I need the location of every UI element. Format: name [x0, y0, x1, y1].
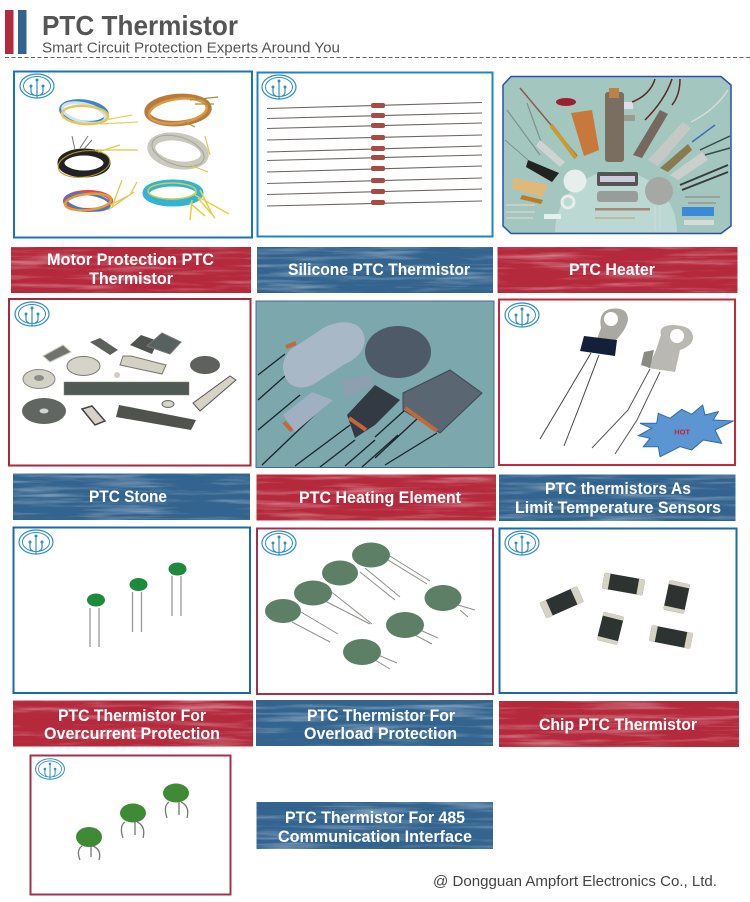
green thermistor 1 — [87, 594, 105, 647]
banner: Overcurrent Protection: Overcurrent Protection — [44, 725, 220, 743]
silver sensor with lug — [592, 325, 693, 454]
banner: Overcurrent Protection: PTC Thermistor For — [58, 707, 207, 725]
green thermistor 3 — [168, 562, 186, 616]
panel: 485 interface thermistors — [30, 756, 230, 894]
banner: PTC thermistors As Limit Temperature Sensors: PTC thermistors As — [545, 480, 691, 498]
coil: grey — [148, 129, 210, 173]
ceramic shapes — [22, 333, 236, 430]
banner: Silicone PTC Thermistor — [257, 247, 493, 293]
panel: overload protection thermistors — [257, 528, 493, 694]
panel: PTC heater photo — [503, 76, 731, 234]
resistor bodies — [371, 103, 385, 205]
banner: Motor Protection PTC Thermistor: Thermistor — [89, 270, 174, 288]
banner: PTC Heating Element — [256, 474, 496, 520]
green thermistor 2 — [130, 578, 148, 632]
subtitle: Smart Circuit Protection Experts Around You — [42, 40, 340, 56]
banner: Overload Protection: PTC Thermistor For — [307, 707, 456, 725]
banner: PTC Stone: PTC Stone — [89, 488, 167, 506]
disc thermistors — [292, 553, 475, 669]
coil: black — [56, 136, 138, 180]
banner: PTC thermistors As Limit Temperature Sensors: Limit Temperature Sensors — [515, 499, 721, 517]
icon: logo — [505, 303, 539, 327]
axial leads — [267, 102, 482, 206]
panel: chip PTC thermistors — [500, 528, 736, 693]
heater tube parts — [505, 79, 730, 218]
icon: logo — [505, 531, 539, 555]
banner: Overload Protection: Overload Protection — [304, 725, 457, 743]
banner: Chip PTC Thermistor — [499, 701, 739, 747]
dark sensor with lug — [540, 308, 628, 446]
callout: HOT starburst: HOT — [674, 430, 691, 436]
banner: Chip PTC Thermistor: Chip PTC Thermistor — [539, 716, 698, 734]
coil: brown — [146, 94, 218, 127]
banner: PTC Heating Element: PTC Heating Element — [299, 489, 461, 507]
banner: Overload Protection — [256, 700, 493, 746]
oval plate — [283, 322, 365, 388]
round plate — [365, 326, 431, 378]
leads — [258, 354, 437, 467]
green leaded thermistor 1 — [76, 827, 102, 860]
banner: Overcurrent Protection — [13, 700, 253, 746]
icon: logo — [19, 530, 53, 554]
discs and modules — [544, 170, 720, 231]
banner: PTC Heater — [498, 247, 738, 293]
icon: logo — [262, 75, 296, 99]
chip 5 — [649, 625, 693, 649]
title: PTC Thermistor — [42, 10, 238, 41]
coil: multicolor — [64, 180, 137, 213]
flat plate blocks — [403, 370, 482, 433]
banner: 485 Communication Interface: Communication Interface — [278, 828, 472, 846]
icon: logo — [36, 759, 64, 779]
banner: PTC Stone — [13, 474, 250, 520]
icon: logo — [15, 302, 49, 326]
callout: HOT starburst — [638, 405, 733, 457]
panel: limit temperature sensors — [499, 300, 735, 465]
header accent bars — [5, 10, 26, 54]
chip 1 — [539, 586, 584, 618]
panel: PTC heating element photo — [256, 301, 494, 468]
banner: Silicone PTC Thermistor: Silicone PTC Thermistor — [288, 261, 471, 279]
coil: cyan — [146, 183, 229, 220]
banner: PTC thermistors As Limit Temperature Sensors — [499, 474, 736, 521]
chip 2 — [602, 573, 645, 596]
banner: 485 Communication Interface: PTC Thermistor For 485 — [285, 809, 465, 827]
panel: motor protection wire coils — [14, 72, 252, 238]
footer credit: @ Dongguan Ampfort Electronics Co., Ltd. — [433, 874, 717, 890]
banner: PTC Heater: PTC Heater — [569, 261, 656, 279]
icon: logo — [20, 74, 54, 98]
banner: Motor Protection PTC Thermistor — [11, 247, 251, 293]
banner: Motor Protection PTC Thermistor: Motor Protection PTC — [47, 251, 214, 269]
green leaded thermistor 3 — [163, 784, 189, 818]
panel: PTC stone ceramic pieces — [9, 299, 250, 466]
coil: blue white yellow — [60, 98, 138, 127]
banner: 485 Communication Interface — [256, 802, 493, 849]
green leaded thermistor 2 — [120, 804, 146, 838]
chip 4 — [597, 612, 624, 645]
panel: silicone axial thermistors — [258, 72, 492, 236]
icon: logo — [262, 531, 296, 555]
chip 3 — [663, 580, 690, 614]
panel: overcurrent protection thermistors — [14, 528, 250, 693]
